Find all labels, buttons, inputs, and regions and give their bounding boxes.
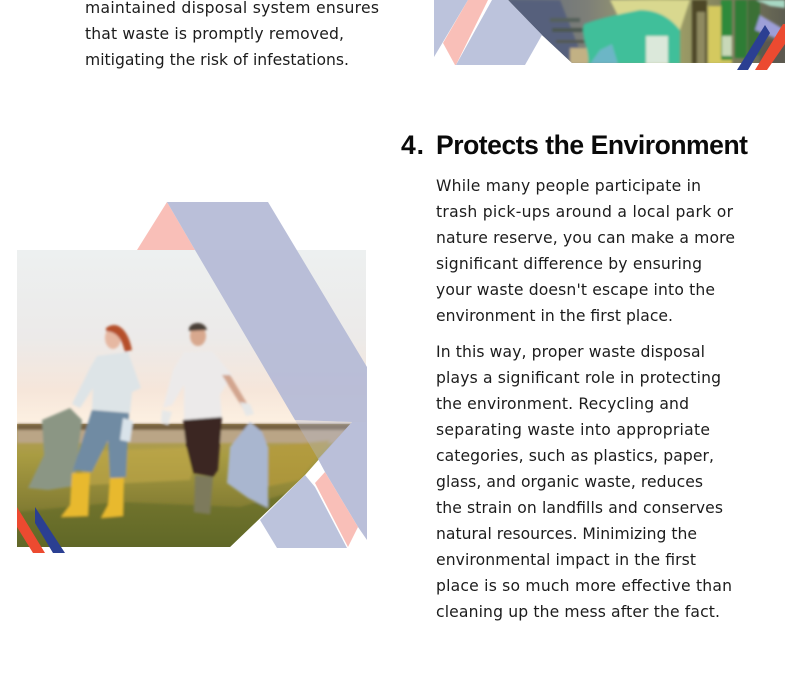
text block: first paragraph: While many people participate in xyxy=(436,177,701,195)
figure: man xyxy=(161,323,254,514)
shape: pink stripe xyxy=(315,472,358,547)
image: two volunteers collecting trash in a field xyxy=(17,202,367,553)
photo: volunteers xyxy=(17,250,367,548)
photo: plastic bags and bottles xyxy=(500,0,790,64)
shape: blue stripe xyxy=(35,507,65,553)
shape: red stripe xyxy=(755,24,785,70)
text block: first paragraph: environment in the first place. xyxy=(436,307,673,325)
heading: Protects the Environment: 4. xyxy=(401,130,424,160)
text block: first paragraph: nature reserve, you can make a more xyxy=(436,229,735,247)
text block: second paragraph: natural resources. Minimizing the xyxy=(436,525,697,543)
text block: first paragraph: trash pick-ups around a local park or xyxy=(436,203,734,221)
figure: right trash bag xyxy=(227,422,268,508)
shape: lavender band xyxy=(167,202,367,540)
text block: second paragraph: categories, such as plastics, paper, xyxy=(436,447,714,465)
text block: second paragraph: glass, and organic waste, reduces xyxy=(436,473,703,491)
text block: second paragraph: cleaning up the mess after the fact. xyxy=(436,603,720,621)
text block: first paragraph: your waste doesn't escape into the xyxy=(436,281,715,299)
text block: previous section ending: mitigating the risk of infestations. xyxy=(85,51,349,69)
text block: second paragraph: the environment. Recycling and xyxy=(436,395,689,413)
text block: first paragraph: significant difference by ensuring xyxy=(436,255,702,273)
text block: first paragraph xyxy=(436,177,735,325)
figure: left trash bag xyxy=(28,408,82,490)
image: sorted recyclable waste with geometric shapes xyxy=(434,0,790,70)
figure: woman xyxy=(61,325,141,518)
heading: Protects the Environment: Protects the Environment xyxy=(436,130,748,160)
text block: second paragraph: In this way, proper waste disposal xyxy=(436,343,705,361)
shape: tinted field overlay xyxy=(295,420,352,459)
shape: lavender centre xyxy=(456,0,542,65)
shape: pink stripe xyxy=(443,0,488,65)
text block: second paragraph: plays a significant role in protecting xyxy=(436,369,721,387)
text block: second paragraph: place is so much more effective than xyxy=(436,577,732,595)
shape: lavender left xyxy=(434,0,468,57)
text block: second paragraph: environmental impact in the first xyxy=(436,551,696,569)
shape: lavender triangle xyxy=(260,475,347,548)
text block: second paragraph: separating waste into appropriate xyxy=(436,421,710,439)
shape: red stripe xyxy=(17,507,45,553)
text block: second paragraph xyxy=(436,343,732,621)
text block: second paragraph: the strain on landfills and conserves xyxy=(436,499,723,517)
shape: pink triangle xyxy=(137,202,195,250)
text block: previous section ending xyxy=(85,0,379,69)
text block: previous section ending: that waste is promptly removed, xyxy=(85,25,344,43)
shape: blue stripe xyxy=(737,25,770,70)
